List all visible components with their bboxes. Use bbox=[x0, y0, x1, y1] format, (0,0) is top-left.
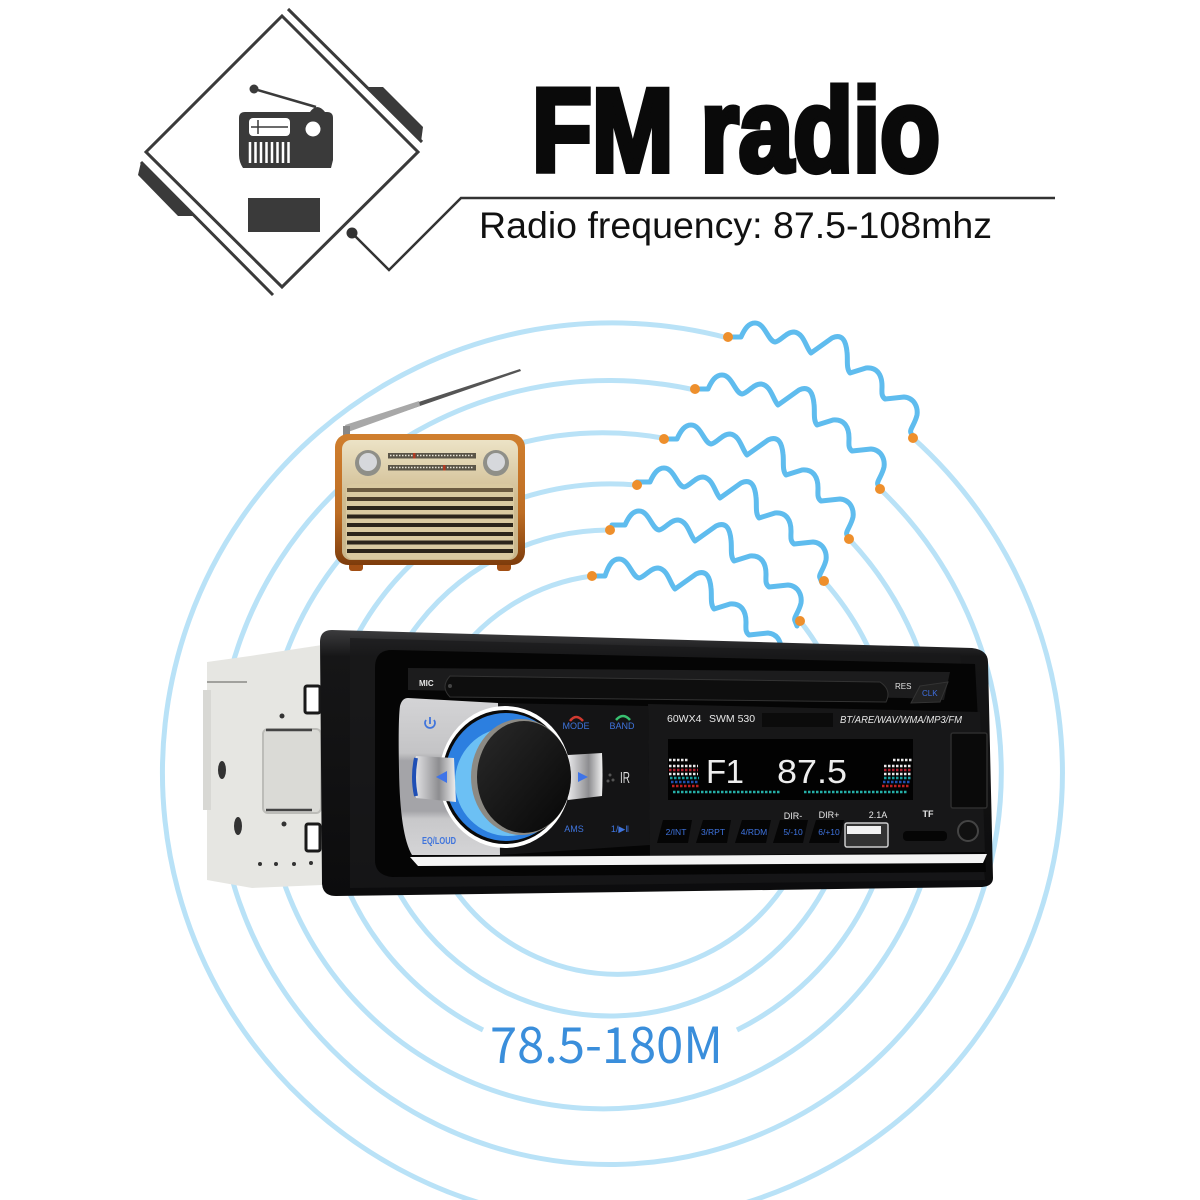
preset buttons: 2/INT bbox=[666, 827, 686, 837]
preset buttons bbox=[657, 820, 844, 843]
port labels: DIR- bbox=[784, 811, 802, 821]
left seek button bbox=[414, 756, 456, 802]
model text bbox=[667, 713, 962, 726]
top cd slot bbox=[408, 668, 950, 702]
bezel inner bbox=[350, 638, 985, 888]
front bezel bbox=[320, 630, 993, 896]
AMS label: AMS bbox=[564, 824, 584, 834]
small dark window bbox=[762, 713, 833, 727]
model text: SWM 530 bbox=[709, 713, 755, 725]
power icon bbox=[425, 717, 435, 728]
frequency value: 87.5 bbox=[777, 753, 847, 790]
main panel bbox=[648, 704, 985, 856]
RES label: RES bbox=[895, 682, 911, 691]
lower left accent bbox=[138, 162, 273, 295]
frequency readout: F1 bbox=[706, 753, 744, 790]
logo: diamond radio badge bbox=[138, 9, 423, 295]
USB port bbox=[845, 823, 888, 847]
knobs bbox=[355, 450, 509, 476]
port labels: DIR+ bbox=[819, 810, 839, 820]
recessed faceplate bbox=[375, 650, 986, 877]
wave 2 bbox=[695, 375, 884, 490]
wave 1 bbox=[728, 323, 917, 438]
LCD display bbox=[668, 739, 913, 800]
speaker grille bbox=[346, 484, 514, 559]
right door bbox=[951, 733, 987, 808]
upper right accent bbox=[288, 9, 423, 142]
connector line bbox=[346, 198, 1055, 270]
port labels: TF bbox=[922, 809, 934, 819]
concentric signal rings bbox=[162, 323, 1062, 1200]
metal cage bbox=[203, 645, 322, 888]
MODE button: MODE bbox=[562, 721, 590, 731]
tuning dials bbox=[388, 453, 476, 470]
dial light ring bbox=[439, 706, 571, 848]
wave 4 bbox=[637, 468, 826, 583]
play label: 1/▶‖ bbox=[611, 824, 629, 834]
preset buttons: 6/+10 bbox=[818, 827, 840, 837]
chrome strip bbox=[410, 854, 987, 866]
port labels bbox=[784, 809, 934, 821]
BAND button bbox=[609, 716, 635, 731]
volume knob bbox=[471, 719, 571, 835]
frequency range label: 78.5-180M bbox=[490, 1006, 723, 1078]
CLK button: CLK bbox=[922, 689, 938, 698]
icon: radio bbox=[239, 84, 333, 168]
EQ/LOUD label: EQ/LOUD bbox=[422, 836, 456, 847]
wave end dots bbox=[587, 332, 918, 626]
preset buttons: 4/RDM bbox=[741, 827, 767, 837]
model text: 60WX4 bbox=[667, 713, 702, 725]
feet bbox=[349, 562, 511, 571]
BAND button: BAND bbox=[609, 721, 635, 731]
cream panel bbox=[342, 440, 518, 560]
radio waves bbox=[592, 323, 917, 654]
wave 5 bbox=[612, 511, 801, 626]
diamond outline bbox=[146, 16, 418, 287]
preset buttons: 5/-10 bbox=[783, 827, 803, 837]
IR label: IR bbox=[620, 770, 630, 787]
wooden case bbox=[335, 434, 525, 565]
control panel bbox=[498, 703, 650, 855]
car stereo unit bbox=[203, 630, 993, 896]
silver panel bbox=[399, 698, 500, 855]
right spectrum bars bbox=[804, 760, 912, 792]
IR label bbox=[606, 770, 630, 787]
wave 6 bbox=[592, 559, 781, 654]
right seek button bbox=[568, 753, 602, 800]
subtitle: Radio frequency: 87.5-108mhz bbox=[479, 205, 992, 246]
antenna bbox=[343, 369, 521, 435]
aux jack bbox=[958, 821, 978, 841]
model text: BT/ARE/WAV/WMA/MP3/FM bbox=[840, 714, 962, 726]
wave 3 bbox=[664, 425, 853, 540]
TF slot bbox=[903, 831, 947, 841]
port labels: 2.1A bbox=[869, 810, 887, 820]
CLK button bbox=[911, 682, 948, 703]
label block bbox=[248, 198, 320, 232]
MIC label: MIC bbox=[419, 679, 434, 688]
retro radio illustration bbox=[335, 369, 525, 571]
left spectrum bars bbox=[669, 760, 780, 792]
title: FM radio bbox=[532, 65, 940, 197]
preset buttons: 3/RPT bbox=[701, 827, 725, 837]
